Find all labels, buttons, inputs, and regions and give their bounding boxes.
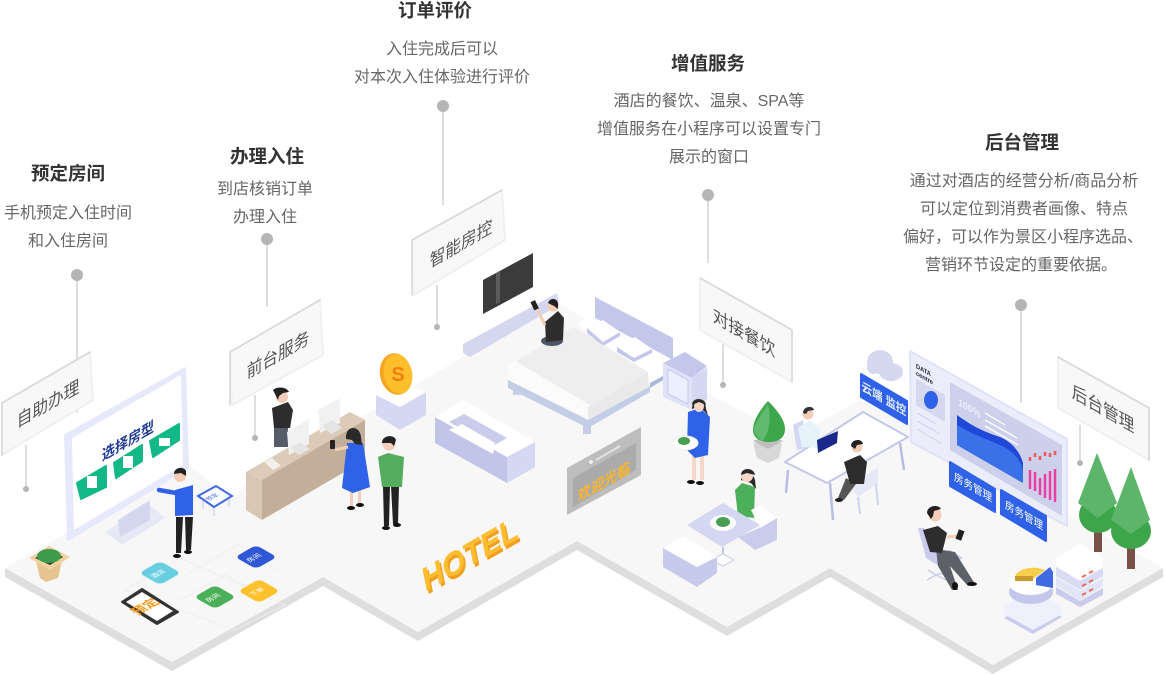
callout: 增值服务: 酒店的餐饮、温泉、SPA等 xyxy=(614,92,804,110)
callout: 增值服务: 增值服务在小程序可以设置专门 xyxy=(597,120,821,138)
sign: 后台管理 xyxy=(1058,357,1149,466)
floor connector lines xyxy=(125,545,285,630)
sign: 前台服务 xyxy=(230,300,323,441)
sign: 对接餐饮 xyxy=(700,278,792,388)
tag: blue xyxy=(235,545,277,569)
woman in green at dining table xyxy=(735,469,756,518)
sign: 自助办理 xyxy=(2,352,93,492)
callout: 后台管理: 偏好，可以作为景区小程序选品、 xyxy=(903,228,1143,246)
icon: cloud xyxy=(867,350,903,381)
sign: 智能房控 xyxy=(412,190,505,330)
tree right xyxy=(1111,467,1151,569)
callout: 后台管理 xyxy=(903,132,1143,403)
sign: 后台管理: 后台管理 xyxy=(1072,381,1134,437)
callout: 订单评价 xyxy=(354,0,530,205)
callout: 增值服务: 展示的窗口 xyxy=(669,148,749,166)
safe cabinet xyxy=(663,352,707,410)
callout: 后台管理: 后台管理 xyxy=(985,132,1059,153)
woman in blue dress xyxy=(330,428,370,510)
callout: 订单评价: 对本次入住体验进行评价 xyxy=(354,68,530,86)
pie chart on platform xyxy=(1004,567,1062,634)
monitor kiosk xyxy=(65,368,188,545)
blue cards: 房务管理: 房务管理 xyxy=(1005,497,1043,533)
callout: 预定房间: 预定房间 xyxy=(31,163,105,184)
data dashboard: DATA xyxy=(916,363,931,379)
tag: yellow xyxy=(238,579,280,603)
dashboard chart panel: 100% xyxy=(958,397,980,421)
dashboard left panel xyxy=(916,379,945,444)
counter monitors xyxy=(287,398,342,455)
callout: 订单评价: 订单评价 xyxy=(398,0,472,21)
receptionist xyxy=(272,388,293,447)
TV stand xyxy=(463,291,559,357)
callout: 预定房间: 和入住房间 xyxy=(28,232,108,250)
person: blue shirt man xyxy=(159,468,193,558)
callout: 增值服务: 增值服务 xyxy=(671,53,745,74)
work table xyxy=(785,412,908,520)
callout: 后台管理: 可以定位到消费者画像、特点 xyxy=(920,200,1128,218)
screen title: 选择房型 xyxy=(102,417,154,465)
server stack xyxy=(1056,544,1103,607)
reception counter xyxy=(246,412,365,520)
waitress with plate xyxy=(672,399,710,485)
seated man light shirt xyxy=(793,407,838,453)
callout: 办理入住: 办理入住 xyxy=(230,146,304,167)
man in green shirt xyxy=(378,436,404,530)
small blue floor sign xyxy=(198,486,232,516)
tree left xyxy=(1078,453,1117,552)
tag: green: 房间 xyxy=(203,592,223,603)
HOTEL floor text: HOTEL xyxy=(421,512,523,602)
callout: 订单评价: 入住完成后可以 xyxy=(386,40,498,58)
tag: light blue xyxy=(139,561,181,585)
person on bed with phone xyxy=(530,299,564,346)
welcome sign: 欢迎光临 xyxy=(578,458,630,506)
tag: green xyxy=(194,585,236,609)
potted leaf plant xyxy=(753,401,785,463)
tablet: 预定 xyxy=(127,597,163,617)
dashboard chart panel xyxy=(950,382,1062,516)
headboard xyxy=(577,297,673,388)
blue cloud control board: 云端 监控 xyxy=(862,378,906,419)
small blue floor sign: 预定 xyxy=(204,492,221,502)
tablet xyxy=(122,589,178,624)
tag: light blue: 酒店 xyxy=(148,568,168,579)
callout: 预定房间 xyxy=(4,163,132,413)
welcome sign xyxy=(567,427,641,515)
callout: 预定房间: 手机预定入住时间 xyxy=(4,204,132,222)
dining booth xyxy=(738,505,777,550)
coin on pedestal xyxy=(376,350,426,430)
HOTEL floor text: HOTEL xyxy=(419,509,521,599)
coin on pedestal: S xyxy=(391,364,405,386)
callout: 办理入住: 办理入住 xyxy=(233,208,297,226)
data dashboard: centre xyxy=(916,370,933,387)
floor tags xyxy=(139,545,280,609)
dining table xyxy=(687,503,760,566)
callout: 后台管理: 营销环节设定的重要依据。 xyxy=(925,256,1117,274)
potted plant xyxy=(29,546,70,582)
tag: blue: 房间 xyxy=(244,552,264,563)
data dashboard xyxy=(910,351,1067,526)
callout: 办理入住 xyxy=(217,146,313,307)
screen cards xyxy=(77,424,179,499)
TV wall xyxy=(483,253,533,314)
seated man with phone xyxy=(918,506,977,590)
blue cards: 房务管理: 房务管理 xyxy=(954,469,992,505)
blue cards: 房务管理 xyxy=(950,462,1046,541)
sign: 对接餐饮: 对接餐饮 xyxy=(713,305,775,361)
floor platform xyxy=(5,303,1163,674)
tag: yellow: 下单 xyxy=(247,586,267,597)
callout: 后台管理: 通过对酒店的经营分析/商品分析 xyxy=(910,172,1138,190)
pillows xyxy=(587,320,652,362)
sofa xyxy=(435,400,535,483)
sign: 智能房控: 智能房控 xyxy=(430,216,492,272)
seated man black shirt xyxy=(835,440,878,514)
sign: 自助办理: 自助办理 xyxy=(17,376,79,432)
stool xyxy=(663,536,717,587)
bed xyxy=(508,327,650,434)
callout: 增值服务 xyxy=(597,53,821,263)
sign: 前台服务: 前台服务 xyxy=(247,327,309,383)
callout: 办理入住: 到店核销订单 xyxy=(217,180,313,198)
